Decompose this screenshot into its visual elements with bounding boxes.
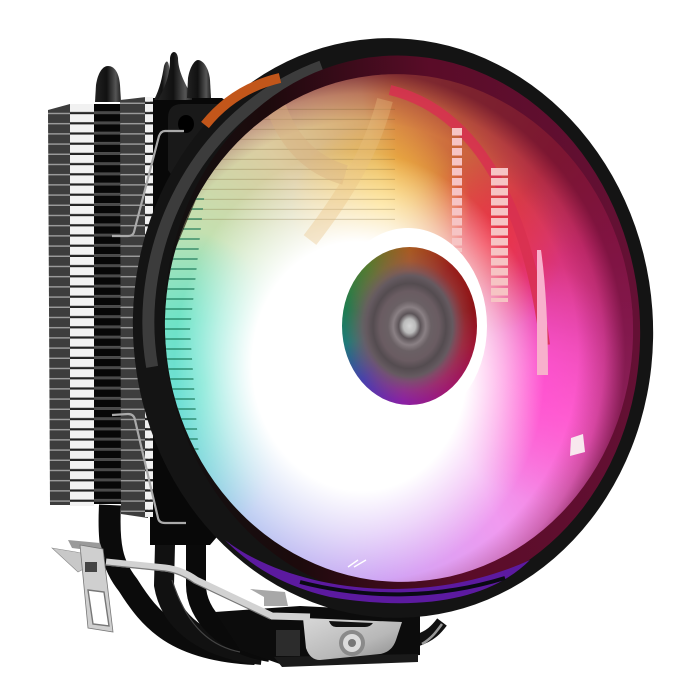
fan details over lit area (165, 85, 585, 568)
mounting base (215, 589, 420, 667)
orange upper-left rim (205, 78, 280, 125)
bottom reflection (348, 560, 366, 567)
white glow ring around hub (329, 228, 487, 424)
fin stack (48, 97, 153, 518)
inner rim (146, 39, 658, 615)
fan RGB lit area (148, 58, 650, 598)
central fan hub (342, 247, 477, 405)
heatpipe tips (95, 52, 211, 102)
screw (339, 630, 365, 656)
outer black ring (113, 21, 673, 635)
pale fin rows at top (188, 109, 395, 220)
fan blade shapes top (272, 95, 345, 175)
green fin rows at left (165, 198, 204, 450)
retention bracket (52, 540, 310, 632)
rear heatsink mass and fan bracket (150, 98, 240, 545)
fan frame (113, 21, 673, 635)
purple lower crescent (225, 540, 530, 603)
heatpipes below the fin stack (110, 505, 442, 655)
fin strips right (452, 128, 548, 375)
ring highlight (131, 66, 342, 367)
fan bracket mounting corner (168, 104, 220, 180)
red blade arc (390, 90, 545, 345)
fan clip wires (112, 131, 186, 523)
dark fin gap upper left (176, 196, 198, 248)
product photo: RGB CPU tower cooler (48, 38, 654, 667)
white highlight patch (570, 434, 585, 456)
